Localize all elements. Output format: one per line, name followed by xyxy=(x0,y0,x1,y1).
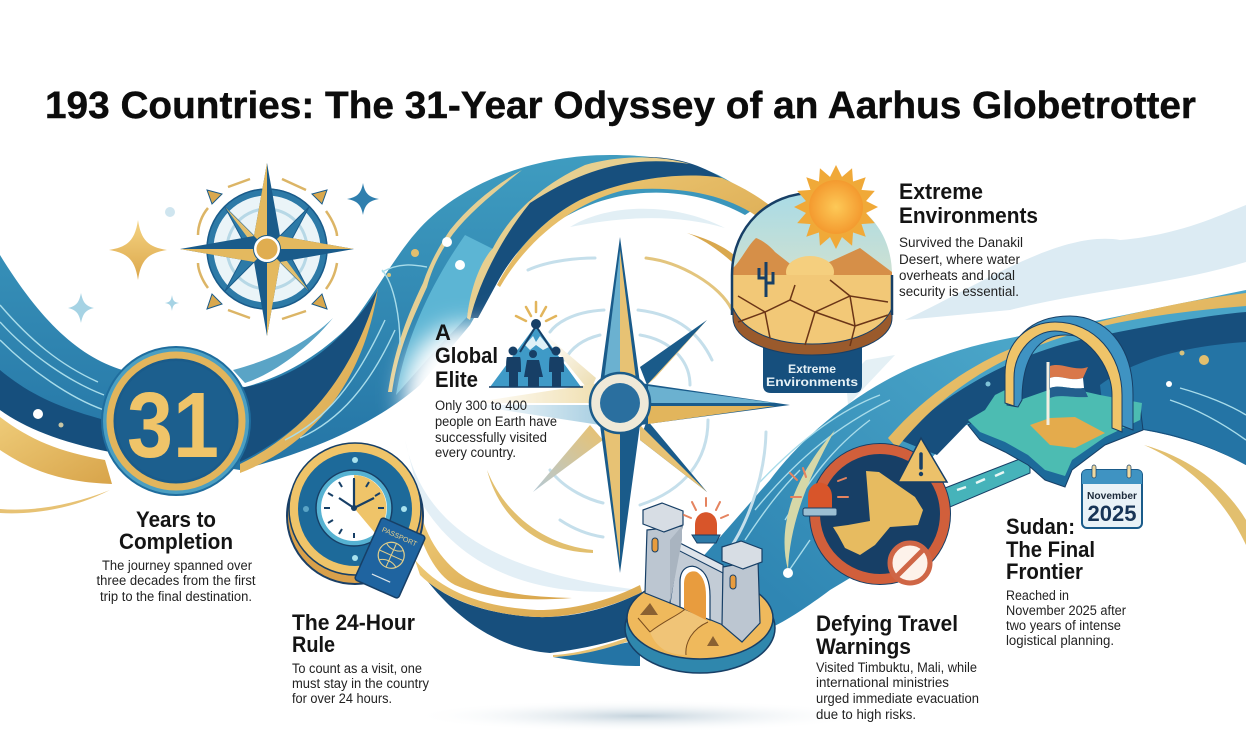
text: extreme environments: overheats and local xyxy=(899,268,1015,283)
text: the 24-hour rule: To count as a visit, one xyxy=(292,661,422,676)
text: a global elite xyxy=(435,320,557,460)
icon: light sparkles xyxy=(68,207,179,323)
title: 193 Countries: The 31-Year Odyssey of an Aarhus Globetrotter xyxy=(45,85,1196,127)
text: the 24-hour rule: must stay in the country xyxy=(292,676,429,691)
text: years to completion: Completion xyxy=(119,529,233,554)
icon: desert dome xyxy=(732,165,892,393)
flag xyxy=(1048,362,1088,425)
text: sudan the final frontier: two years of intense xyxy=(1006,618,1121,633)
banner: extreme environments: Environments xyxy=(766,375,858,389)
text: extreme environments xyxy=(899,179,1038,299)
right flowing ribbon xyxy=(700,290,1246,628)
no-entry sign xyxy=(890,543,930,583)
icon: 31 medal xyxy=(102,347,250,495)
text: defying travel warnings: Defying Travel xyxy=(816,611,958,636)
castle xyxy=(643,503,762,642)
icon: calendar: 2025 xyxy=(1088,501,1136,526)
text: defying travel warnings: Visited Timbuktu, Mali, while xyxy=(816,660,977,675)
icon: calendar xyxy=(1082,465,1142,528)
text: the 24-hour rule: for over 24 hours. xyxy=(292,691,392,706)
warning triangle xyxy=(898,438,947,482)
text: years to completion: three decades from the first xyxy=(96,573,256,588)
text: extreme environments: Desert, where water xyxy=(899,252,1021,267)
text: a global elite: A xyxy=(435,320,451,345)
bottom shadow xyxy=(410,700,870,730)
text: extreme environments: Environments xyxy=(899,203,1038,228)
text: defying travel warnings: due to high risks. xyxy=(816,707,916,722)
icon: castle on desert disc xyxy=(625,498,775,673)
icon: calendar: November xyxy=(1087,491,1137,502)
icon: people on summit xyxy=(489,302,583,387)
text: the 24-hour rule xyxy=(292,610,429,706)
left tower xyxy=(645,526,682,603)
icon: road to final map xyxy=(945,316,1143,507)
icon: clock medallion xyxy=(287,443,426,599)
text: sudan the final frontier: Sudan: xyxy=(1006,514,1075,539)
text: a global elite: Global xyxy=(435,343,498,368)
bottom flowing ribbon xyxy=(415,510,642,666)
pale swooshes around centre xyxy=(405,205,1246,592)
icon: sun xyxy=(794,165,878,249)
icon: blue sparkle xyxy=(347,183,379,215)
text: defying travel warnings xyxy=(816,611,979,722)
text: a global elite: Elite xyxy=(435,367,478,392)
text: sudan the final frontier xyxy=(1006,514,1126,648)
text: years to completion: The journey spanned over xyxy=(102,558,252,573)
left flowing ribbon xyxy=(0,155,772,513)
banner: extreme environments xyxy=(763,340,862,393)
map of sudan region xyxy=(968,386,1143,487)
text: sudan the final frontier: November 2025 after xyxy=(1006,603,1126,618)
text: extreme environments: security is essential. xyxy=(899,284,1019,299)
text: sudan the final frontier: logistical planning. xyxy=(1006,633,1114,648)
text: defying travel warnings: international ministries xyxy=(816,675,949,690)
text: defying travel warnings: urged immediate evacuation xyxy=(816,691,979,706)
text: extreme environments: Survived the Danakil xyxy=(899,235,1023,250)
icon: alarm beacon xyxy=(684,498,728,543)
upper band xyxy=(396,235,495,395)
white fade behind central compass xyxy=(400,300,560,500)
text: years to completion: Years to xyxy=(136,507,216,532)
text: a global elite: Only 300 to 400 xyxy=(435,398,527,413)
arch xyxy=(1005,316,1133,432)
text: sudan the final frontier: Reached in xyxy=(1006,588,1069,603)
banner: extreme environments: Extreme xyxy=(788,362,836,376)
text: a global elite: successfully visited xyxy=(435,430,547,445)
icon: passport xyxy=(354,517,426,599)
mali map xyxy=(833,471,923,555)
text: sudan the final frontier: The Final xyxy=(1006,537,1095,562)
icon: central compass star xyxy=(470,237,790,573)
text: the 24-hour rule: The 24-Hour xyxy=(292,610,415,635)
icon: mali warning circle xyxy=(790,438,951,585)
gate xyxy=(680,566,710,620)
text: a global elite: every country. xyxy=(435,445,516,460)
icon: gold sparkle xyxy=(109,220,167,280)
number 31: 31 xyxy=(127,373,219,477)
icon: passport: PASSPORT xyxy=(381,527,418,549)
text: sudan the final frontier: Frontier xyxy=(1006,559,1083,584)
text: a global elite: people on Earth have xyxy=(435,414,557,429)
text: defying travel warnings: Warnings xyxy=(816,634,911,659)
icon: small compass rose xyxy=(180,163,354,336)
text: extreme environments: Extreme xyxy=(899,179,983,204)
right tower xyxy=(722,560,760,642)
text: the 24-hour rule: Rule xyxy=(292,632,335,657)
text: years to completion xyxy=(96,507,256,604)
wall xyxy=(670,538,723,625)
siren xyxy=(790,468,848,516)
text: years to completion: trip to the final destination. xyxy=(100,589,252,604)
